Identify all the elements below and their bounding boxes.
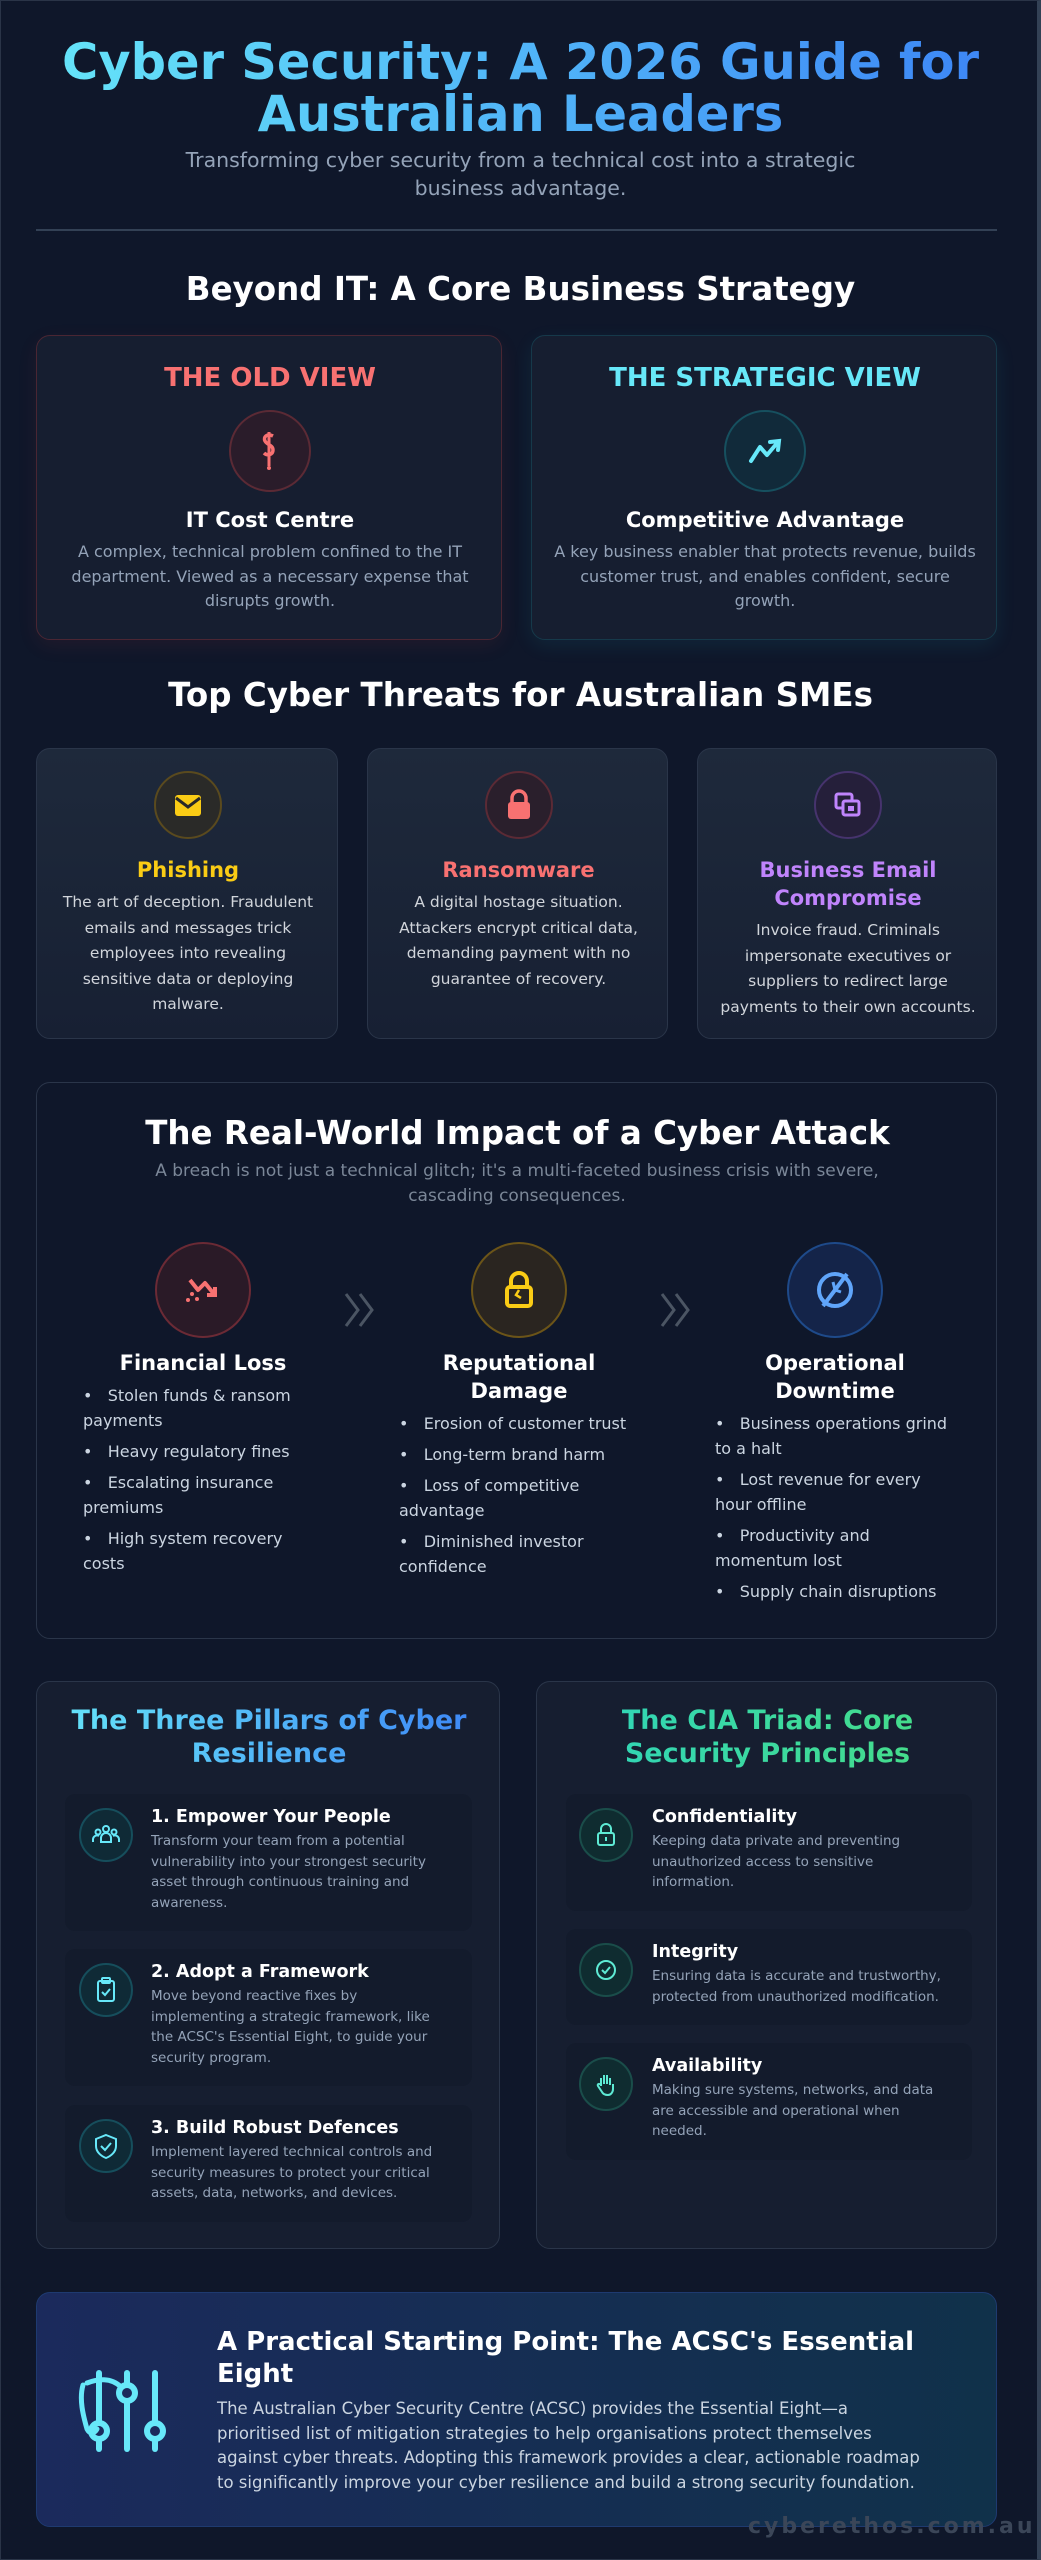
item: adopt framework: Move beyond reactive fixes by implementing a strategic framework, like the ACSC's Essential Eight, to guide your security program. bbox=[151, 1988, 430, 2066]
text: BEC title bbox=[760, 858, 936, 910]
item: empower people: 1. Empower Your People bbox=[151, 1807, 391, 1827]
column: operational downtime: • Business operations grind to a halt bbox=[715, 1414, 947, 1458]
text: essential eight body: The Australian Cyber Security Centre (ACSC) provides the Essential Eight—a prioritised list of mitigation strategies to help organisations protect themselves against cyber threats. Adopting this framework provides a clear, actionable roadmap to significantly improve your cyber resilience and build a strong security foundation. bbox=[217, 2399, 920, 2492]
heading: CIA triad: Security Principles bbox=[625, 1738, 910, 1769]
item: adopt framework: 2. Adopt a Framework bbox=[151, 1962, 369, 1982]
item: availability: Making sure systems, networks, and data are accessible and operational when needed. bbox=[652, 2082, 933, 2139]
text: BEC desc: Invoice fraud. Criminals impersonate executives or suppliers to redirect large payments to their own accounts. bbox=[720, 921, 976, 1016]
heading: CIA triad bbox=[537, 1704, 998, 1770]
column: operational downtime: • Supply chain disruptions bbox=[715, 1582, 937, 1601]
column: reputational damage: • Loss of competitive advantage bbox=[399, 1476, 579, 1520]
arrow: chevron 1 bbox=[345, 1293, 374, 1327]
arrow: chevron 2 bbox=[661, 1293, 690, 1327]
column: financial loss: • Escalating insurance premiums bbox=[83, 1473, 273, 1517]
text: competitive advantage: Competitive Advantage bbox=[626, 508, 904, 532]
icon: clipboard bbox=[79, 1963, 133, 2017]
heading: CIA triad: The CIA Triad: Core bbox=[622, 1705, 913, 1736]
text: ransomware desc: A digital hostage situation. Attackers encrypt critical data, demanding payment with no guarantee of recovery. bbox=[399, 893, 638, 988]
item: confidentiality bbox=[566, 1794, 972, 1911]
text: IT cost centre: IT Cost Centre bbox=[186, 508, 354, 532]
icon: cost bbox=[229, 410, 311, 492]
item: integrity: Ensuring data is accurate and trustworthy, protected from unauthorized modification. bbox=[652, 1968, 941, 2004]
heading: three pillars: Resilience bbox=[192, 1738, 346, 1769]
heading: three pillars bbox=[37, 1704, 501, 1770]
panel: strategic view bbox=[531, 335, 997, 640]
column: reputational damage bbox=[399, 1351, 626, 1576]
item: confidentiality: Keeping data private and preventing unauthorized access to sensitive information. bbox=[652, 1833, 900, 1890]
icon: lock bbox=[485, 771, 553, 839]
column: financial loss: Financial Loss bbox=[120, 1351, 286, 1375]
icon: check badge bbox=[579, 1943, 633, 1997]
item: integrity bbox=[566, 1929, 972, 2025]
text: ransomware title: Ransomware bbox=[442, 858, 595, 882]
text: BEC title: Business Email bbox=[760, 858, 936, 882]
heading: the strategic view: THE STRATEGIC VIEW bbox=[609, 363, 921, 393]
text: strategic description: A key business enabler that protects revenue, builds customer trust, and enables confident, secure growth. bbox=[554, 542, 976, 610]
item: robust defences: Implement layered technical controls and security measures to protect your critical assets, data, networks, and devices. bbox=[151, 2144, 432, 2201]
item: availability bbox=[566, 2043, 972, 2160]
panel: old view bbox=[36, 335, 502, 640]
panel: CIA triad bbox=[536, 1681, 997, 2249]
icon: financial loss bbox=[155, 1242, 251, 1338]
icon: trend up bbox=[724, 410, 806, 492]
icon: envelope bbox=[154, 771, 222, 839]
column: financial loss: • Heavy regulatory fines bbox=[83, 1442, 290, 1461]
item: confidentiality: Confidentiality bbox=[652, 1807, 797, 1827]
panel: business email compromise bbox=[697, 748, 997, 1039]
item: adopt framework bbox=[65, 1949, 472, 2086]
panel: three pillars bbox=[36, 1681, 500, 2249]
subtitle: Transforming cyber security from a technical cost into a strategic business advantage. bbox=[186, 148, 855, 200]
column: reputational damage: Reputational bbox=[443, 1351, 595, 1375]
icon: sliders bbox=[78, 2370, 166, 2452]
icon: people bbox=[79, 1808, 133, 1862]
icon: shield bbox=[79, 2119, 133, 2173]
column: reputational damage: • Diminished investor confidence bbox=[399, 1532, 584, 1576]
heading: three pillars: The Three Pillars of Cyber bbox=[72, 1705, 466, 1736]
text: phishing desc: The art of deception. Fraudulent emails and messages trick employees into revealing sensitive data or deploying malware. bbox=[63, 893, 313, 1013]
column: reputational damage: • Erosion of customer trust bbox=[399, 1414, 626, 1433]
icon: operational downtime bbox=[787, 1242, 883, 1338]
panel: real-world impact bbox=[36, 1082, 997, 1639]
heading: beyond IT: Beyond IT: A Core Business Strategy bbox=[186, 270, 855, 308]
heading: impact: The Real-World Impact of a Cyber Attack bbox=[145, 1114, 890, 1152]
item: availability: Availability bbox=[652, 2056, 762, 2076]
text: impact subtitle: A breach is not just a technical glitch; it's a multi-faceted business crisis with severe, cascading consequences. bbox=[155, 1161, 879, 1206]
item: empower people: Transform your team from a potential vulnerability into your strongest security asset through continuous training and awareness. bbox=[151, 1833, 426, 1910]
item: robust defences: 3. Build Robust Defences bbox=[151, 2118, 399, 2138]
text: phishing title: Phishing bbox=[137, 858, 239, 882]
text: old view description: A complex, technical problem confined to the IT department. Viewed as a necessary expense that disrupts growth. bbox=[71, 542, 469, 610]
column: operational downtime: • Lost revenue for every hour offline bbox=[715, 1470, 921, 1514]
panel: essential eight bbox=[36, 2292, 997, 2527]
icon: windows bbox=[814, 771, 882, 839]
title: Australian Leaders bbox=[258, 85, 783, 143]
panel: phishing bbox=[36, 748, 338, 1039]
item: robust defences bbox=[65, 2105, 472, 2222]
icon: reputational damage bbox=[471, 1242, 567, 1338]
column: operational downtime: Operational bbox=[765, 1351, 905, 1375]
heading: top cyber threats: Top Cyber Threats for Australian SMEs bbox=[168, 676, 873, 714]
icon: lock bbox=[579, 1808, 633, 1862]
title bbox=[10, 36, 1031, 140]
item: integrity: Integrity bbox=[652, 1942, 738, 1962]
column: reputational damage: • Long-term brand harm bbox=[399, 1445, 605, 1464]
column: operational downtime: • Productivity and momentum lost bbox=[715, 1526, 870, 1570]
column: financial loss: • High system recovery costs bbox=[83, 1529, 282, 1573]
heading: the old view: THE OLD VIEW bbox=[164, 363, 376, 393]
column: reputational damage: Damage bbox=[471, 1379, 567, 1403]
column: operational downtime bbox=[715, 1351, 947, 1601]
heading: essential eight: A Practical Starting Point: The ACSC's Essential Eight bbox=[217, 2327, 914, 2389]
text: BEC title: Compromise bbox=[774, 886, 922, 910]
icon: hand bbox=[579, 2057, 633, 2111]
column: financial loss bbox=[83, 1351, 291, 1573]
column: financial loss: • Stolen funds & ransom payments bbox=[83, 1386, 291, 1430]
item: empower people bbox=[65, 1794, 472, 1931]
watermark: cyberethos.com.au bbox=[748, 2514, 1036, 2539]
title: Cyber Security: A 2026 Guide for bbox=[62, 33, 979, 91]
column: operational downtime: Downtime bbox=[775, 1379, 895, 1403]
panel: ransomware bbox=[367, 748, 668, 1039]
